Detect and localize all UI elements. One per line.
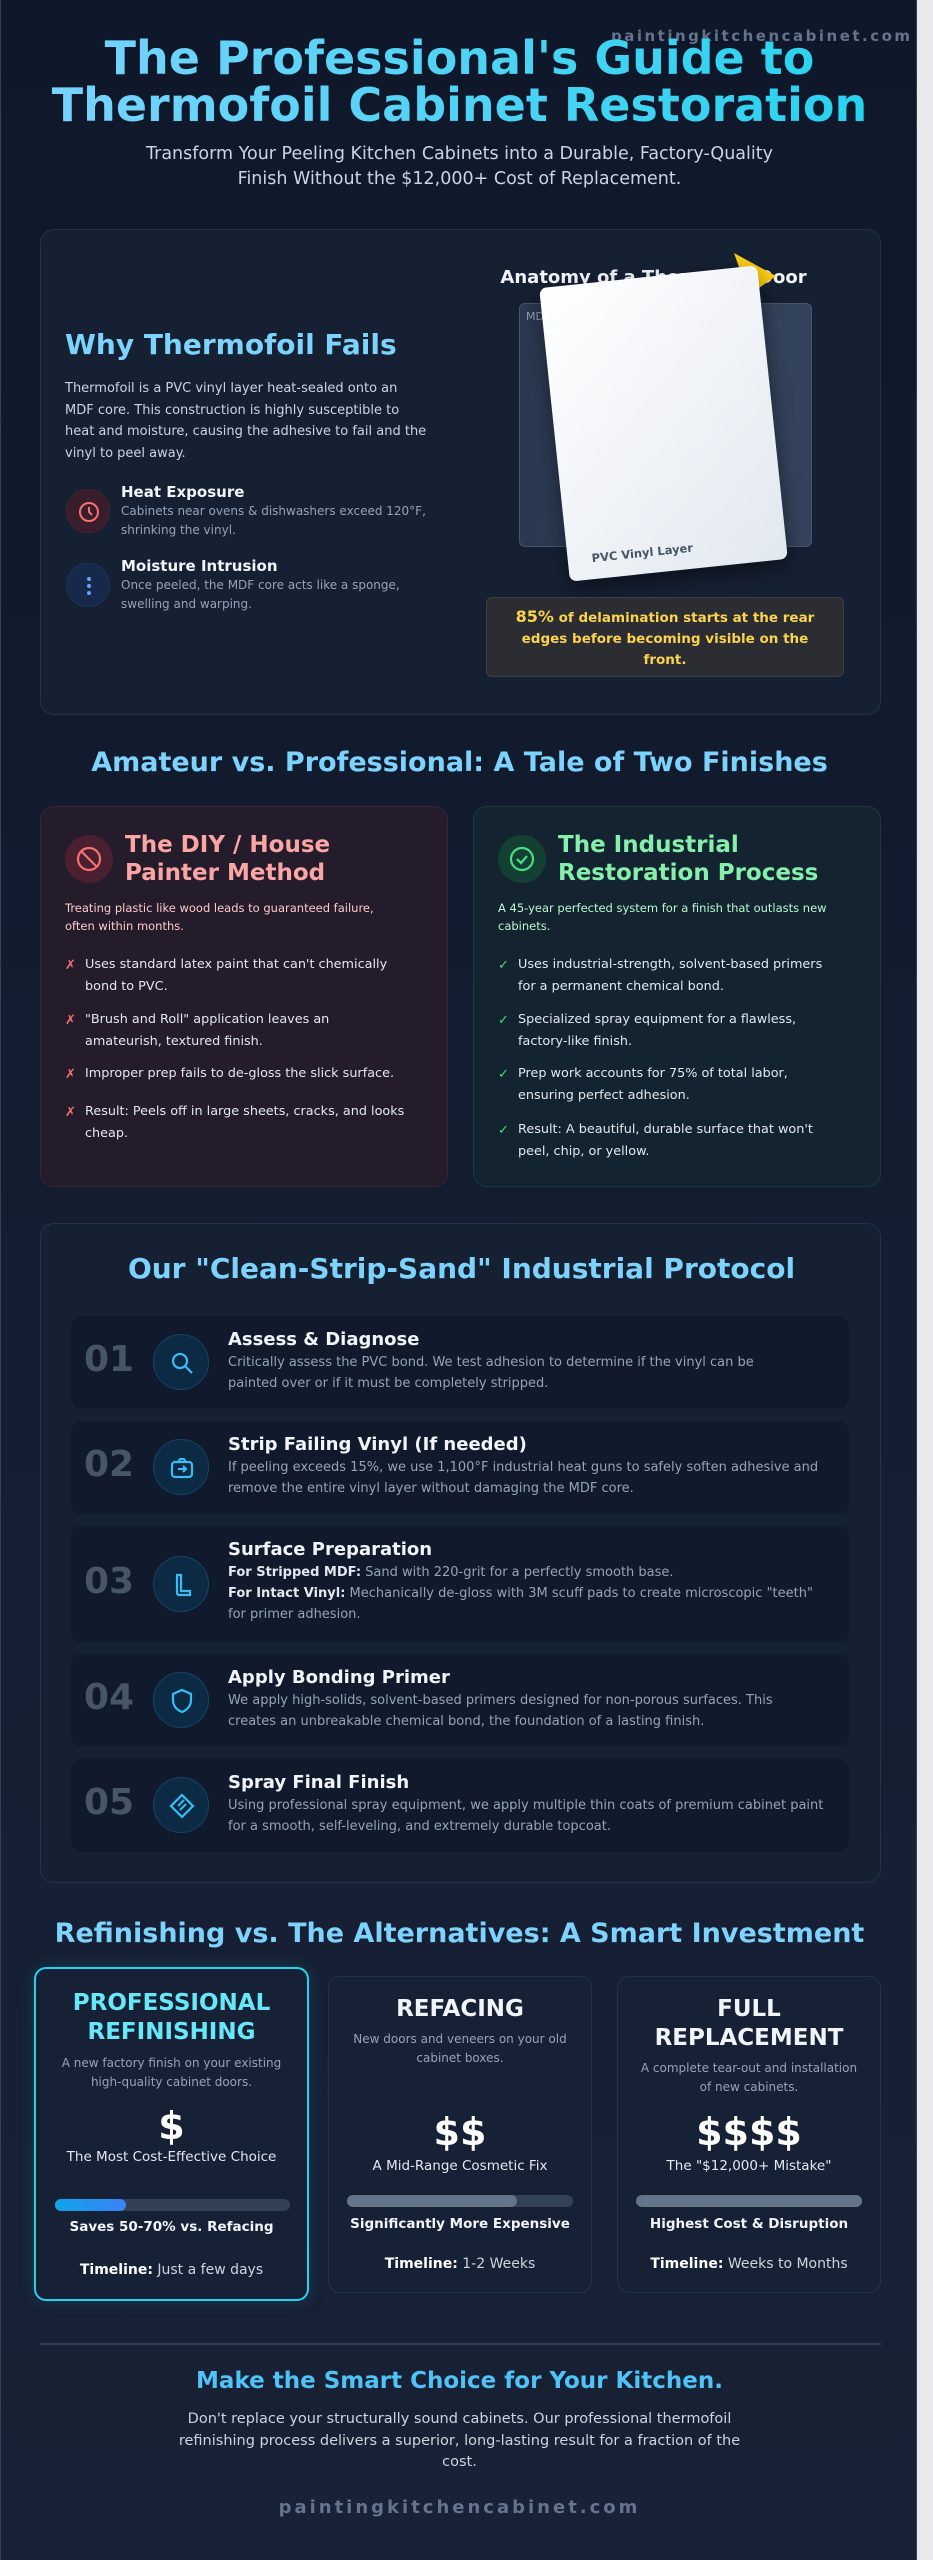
heading: protocol: Our "Clean-Strip-Sand" Industrial Protocol [128, 1252, 795, 1285]
card: full replacement: Highest Cost & Disruption [650, 2216, 848, 2232]
card: full replacement: Timeline: Weeks to Months [650, 2256, 848, 2272]
step 02 [71, 1421, 849, 1514]
heading: amateur vs professional: Amateur vs. Professional: A Tale of Two Finishes [91, 747, 828, 778]
card: full replacement: REPLACEMENT [655, 2025, 843, 2051]
text: heat exposure: Cabinets near ovens & dishwashers exceed 120°F, shrinking the vinyl. [121, 504, 426, 537]
step 01: Critically assess the PVC bond. We test adhesion to determine if the vinyl can be painted over or if it must be completely stripped. [228, 1355, 754, 1391]
footer: website: paintingkitchencabinet.com [279, 2497, 640, 2518]
text: explanation: Thermofoil is a PVC vinyl layer heat-sealed onto an MDF core. This construction is highly susceptible to heat and moisture, causing the adhesive to fail and the vinyl to peel away. [65, 381, 426, 460]
title: Thermofoil Cabinet Restoration [52, 78, 867, 132]
card: refacing: Timeline: 1-2 Weeks [385, 2256, 535, 2272]
step 03 [71, 1526, 849, 1642]
text: moisture intrusion: Once peeled, the MDF core acts like a sponge, swelling and warping. [121, 578, 400, 611]
card: professional refinishing: A new factory finish on your existing high-quality cabinet doors. [62, 2056, 281, 2089]
heading: DIY [125, 832, 330, 886]
list: pro benefits: Prep work accounts for 75% of total labor, ensuring perfect adhesion. [518, 1066, 788, 1102]
card: refacing: New doors and veneers on your old cabinet boxes. [353, 2032, 567, 2065]
card: professional refinishing: Saves 50-70% vs. Refacing [69, 2219, 274, 2235]
card: professional refinishing [34, 1967, 309, 2301]
watermark top: paintingkitchencabinet.com [611, 27, 913, 45]
title: The Professional's Guide to [105, 31, 814, 85]
step 04: 04 [84, 1677, 134, 1718]
card: full replacement: The "$12,000+ Mistake" [667, 2158, 831, 2174]
icon: moisture [66, 563, 110, 607]
panel: DIY method [40, 806, 448, 1187]
heading: DIY: The DIY / House [125, 832, 330, 858]
icon: spray [153, 1777, 209, 1833]
card: full replacement: A complete tear-out and installation of new cabinets. [641, 2061, 857, 2094]
list: pro benefits [498, 957, 822, 1158]
callout: 85%: 85% of delamination starts at the rear edges before becoming visible on the front. [516, 607, 814, 668]
step 04: Apply Bonding Primer [228, 1667, 450, 1688]
text: CTA: Don't replace your structurally sound cabinets. Our professional thermofoil refinishing process delivers a superior, long-lasting result for a fraction of the cost. [179, 2411, 740, 2470]
diagram: PVC vinyl layer [539, 265, 788, 582]
text: moisture intrusion: Moisture Intrusion [121, 557, 278, 575]
card: professional refinishing: Timeline: Just a few days [80, 2262, 263, 2278]
list: pro benefits: ✓ [498, 1067, 509, 1082]
step 05: Using professional spray equipment, we apply multiple thin coats of premium cabinet paint for a smooth, self-leveling, and extremely durable topcoat. [228, 1798, 823, 1834]
card: refacing: Significantly More Expensive [350, 2216, 570, 2232]
list: DIY failures [65, 957, 404, 1140]
step 03: For Stripped MDF: Sand with 220-grit for a perfectly smooth base. [228, 1565, 674, 1580]
step 03: Surface Preparation [228, 1539, 432, 1560]
icon: strip [153, 1439, 209, 1495]
card: refacing: REFACING [396, 1996, 524, 2022]
list: pro benefits: ✓ [498, 1013, 509, 1028]
heading: anatomy: Anatomy of a Thermofoil Door [500, 267, 807, 288]
heading: industrial: The Industrial [558, 832, 739, 858]
heading: DIY: Painter Method [125, 860, 325, 886]
panel: protocol [40, 1223, 881, 1883]
icon: magnifier [153, 1334, 209, 1390]
step 03: For Intact Vinyl: Mechanically de-gloss with 3M scuff pads to create microscopic "teeth" for primer adhesion. [228, 1586, 813, 1622]
text: DIY intro: Treating plastic like wood leads to guaranteed failure, often within months. [65, 901, 374, 933]
card: full replacement: $$$$ [696, 2110, 802, 2154]
step 03: 03 [84, 1561, 134, 1602]
subtitle: Transform Your Peeling Kitchen Cabinets into a Durable, Factory-Quality Finish Without the $12,000+ Cost of Replacement. [146, 144, 773, 189]
list: DIY failures: Uses standard latex paint that can't chemically bond to PVC. [85, 957, 387, 994]
step 02: Strip Failing Vinyl (If needed) [228, 1434, 527, 1455]
panel: industrial process [473, 806, 881, 1187]
icon: heat clock [66, 489, 110, 533]
icon: shield [153, 1672, 209, 1728]
heading: industrial: Restoration Process [558, 860, 818, 886]
text: industrial intro: A 45-year perfected system for a finish that outlasts new cabinets. [498, 901, 827, 933]
card: refacing: $$ [434, 2110, 486, 2154]
step 01 [71, 1316, 849, 1408]
card: refacing [328, 1976, 592, 2293]
list: pro benefits: Result: A beautiful, durable surface that won't peel, chip, or yellow. [518, 1122, 813, 1158]
heading: industrial [558, 832, 818, 886]
icon: prohibited [65, 835, 113, 883]
step 02: If peeling exceeds 15%, we use 1,100°F industrial heat guns to safely soften adhesive and remove the entire vinyl layer without damaging the MDF core. [228, 1460, 818, 1496]
list: DIY failures: ✗ [65, 958, 76, 973]
step 01: 01 [84, 1339, 134, 1380]
list: pro benefits: ✓ [498, 1123, 509, 1138]
heading: CTA: Make the Smart Choice for Your Kitchen. [196, 2368, 723, 2394]
list: DIY failures: Result: Peels off in large sheets, cracks, and looks cheap. [85, 1104, 404, 1140]
card: professional refinishing: REFINISHING [88, 2019, 256, 2045]
heading: alternatives: Refinishing vs. The Alternatives: A Smart Investment [55, 1918, 864, 1949]
list: pro benefits: ✓ [498, 958, 509, 973]
text: heat exposure: Heat Exposure [121, 483, 244, 501]
step 02: 02 [84, 1444, 134, 1485]
text: heat exposure [121, 483, 426, 537]
icon: sanding [153, 1556, 209, 1612]
step 05 [71, 1759, 849, 1852]
step 01: Assess & Diagnose [228, 1329, 419, 1350]
title [1, 35, 918, 129]
heading: why thermofoil fails: Why Thermofoil Fails [65, 328, 397, 361]
list: pro benefits: Uses industrial-strength, solvent-based primers for a permanent chemical bond. [518, 957, 822, 994]
diagram: MDF core: MDF Core [526, 310, 579, 323]
list: DIY failures: ✗ [65, 1105, 76, 1120]
list: DIY failures: "Brush and Roll" application leaves an amateurish, textured finish. [85, 1012, 329, 1048]
list: DIY failures: ✗ [65, 1013, 76, 1028]
step 05: 05 [84, 1782, 134, 1823]
step 05: Spray Final Finish [228, 1772, 409, 1793]
step 04 [71, 1654, 849, 1746]
callout: 85% [486, 597, 844, 677]
panel: why thermofoil fails [40, 229, 881, 715]
text: moisture intrusion [121, 557, 400, 611]
diagram: yellow peel [734, 253, 776, 288]
card: full replacement [617, 1976, 881, 2293]
card: professional refinishing: PROFESSIONAL [73, 1990, 270, 2016]
list: pro benefits: Specialized spray equipment for a flawless, factory-like finish. [518, 1012, 796, 1048]
card: refacing: A Mid-Range Cosmetic Fix [373, 2158, 547, 2174]
step 04: We apply high-solids, solvent-based primers designed for non-porous surfaces. This creates an unbreakable chemical bond, the foundation of a lasting finish. [228, 1693, 773, 1729]
list: DIY failures: ✗ [65, 1067, 76, 1082]
card: professional refinishing: $ [158, 2104, 185, 2148]
diagram: PVC vinyl layer: PVC Vinyl Layer [591, 541, 694, 565]
icon: check [498, 835, 546, 883]
diagram: MDF core [519, 303, 812, 547]
list: DIY failures: Improper prep fails to de-gloss the slick surface. [85, 1066, 394, 1081]
card: full replacement: FULL [717, 1996, 781, 2022]
card: professional refinishing: The Most Cost-Effective Choice [67, 2149, 276, 2165]
